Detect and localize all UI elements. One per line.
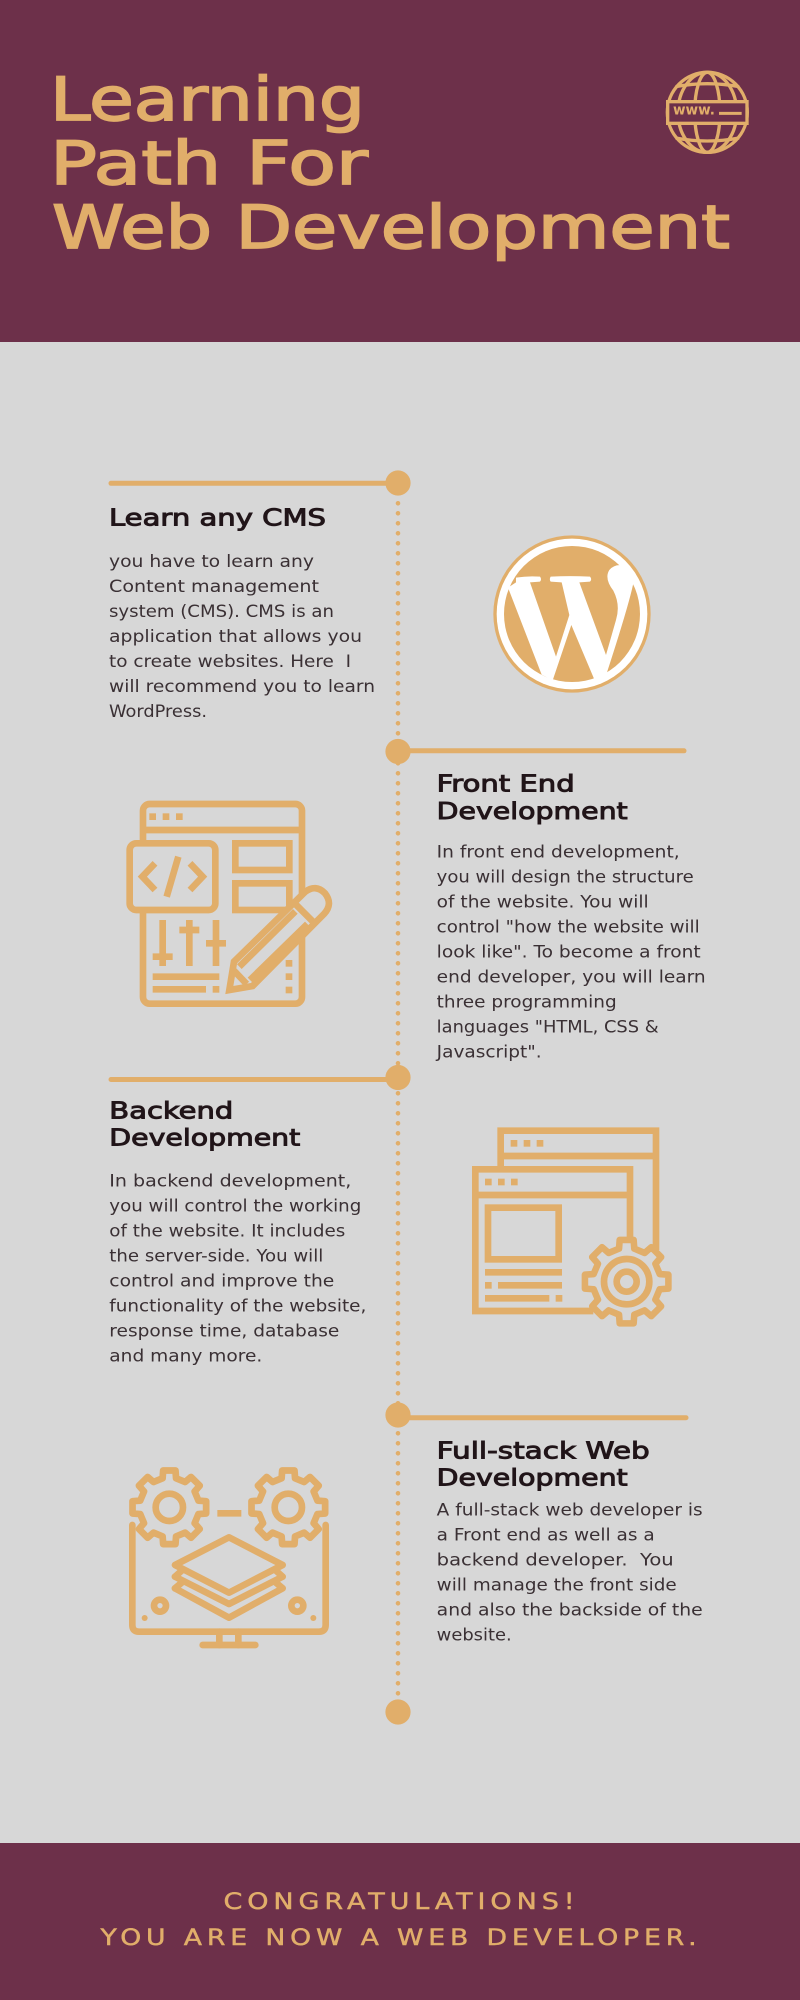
heading: Full-stack Web Development: Development bbox=[437, 1464, 628, 1492]
connector line 2 bbox=[385, 739, 684, 764]
body text: Full-stack Web Development: will manage the front side bbox=[437, 1575, 677, 1595]
body text: Front End Development: control "how the website will bbox=[437, 916, 700, 936]
heading: Backend Development bbox=[109, 1096, 300, 1152]
heading: Backend Development: Backend bbox=[109, 1096, 233, 1124]
footer text: YOU ARE NOW A WEB DEVELOPER. bbox=[99, 1926, 702, 1951]
timeline dotted line bbox=[396, 503, 400, 1705]
body text: Backend Development: control and improve the bbox=[109, 1270, 334, 1290]
title: Web Development bbox=[52, 193, 730, 263]
body text: Front End Development: end developer, you will learn bbox=[437, 966, 706, 986]
body text: Backend Development: response time, database bbox=[109, 1320, 339, 1340]
heading: Front End Development: Development bbox=[437, 797, 628, 825]
icon: monitor with gears and layers bbox=[132, 1471, 326, 1645]
footer text bbox=[99, 1890, 702, 1951]
body text: Backend Development: of the website. It includes bbox=[109, 1220, 345, 1240]
body text: Full-stack Web Development: website. bbox=[437, 1625, 512, 1645]
body text: Front End Development: In front end development, bbox=[437, 841, 680, 861]
body text: Backend Development: and many more. bbox=[109, 1345, 262, 1365]
title: Learning bbox=[50, 65, 365, 135]
body text: Backend Development: you will control the working bbox=[109, 1195, 361, 1215]
heading: Full-stack Web Development bbox=[437, 1436, 650, 1492]
icon: wordpress logo bbox=[493, 535, 651, 693]
heading: Backend Development: Development bbox=[109, 1124, 300, 1152]
body text: Full-stack Web Development bbox=[437, 1500, 703, 1645]
body text: Front End Development: languages "HTML, CSS & bbox=[437, 1016, 659, 1036]
body text: Front End Development: look like". To become a front bbox=[437, 941, 701, 961]
body text: Learn any CMS: Content management bbox=[109, 576, 319, 596]
panel: footer bbox=[0, 1843, 800, 2000]
body text: Full-stack Web Development: backend developer. You bbox=[437, 1550, 674, 1570]
body text: Full-stack Web Development: and also the backside of the bbox=[437, 1600, 703, 1620]
body text: Front End Development: of the website. You will bbox=[437, 891, 649, 911]
footer text: CONGRATULATIONS! bbox=[224, 1890, 580, 1915]
body text: Front End Development: three programming bbox=[437, 991, 617, 1011]
icon: globe www: www. bbox=[673, 103, 715, 119]
connector line 1 bbox=[111, 470, 411, 496]
body text: Front End Development bbox=[436, 841, 706, 1061]
section: Learn any CMS bbox=[109, 470, 651, 721]
body text: Learn any CMS: will recommend you to learn bbox=[109, 676, 375, 696]
panel: header bbox=[0, 0, 800, 342]
body text: Learn any CMS: application that allows you bbox=[109, 626, 362, 646]
icon: web design window with code and pencil bbox=[130, 804, 329, 1004]
section: Full-stack Web Development bbox=[132, 1402, 703, 1645]
icon: browser windows with gear bbox=[475, 1131, 668, 1323]
body text: Front End Development: you will design the structure bbox=[437, 866, 694, 886]
body text: Learn any CMS: to create websites. Here I bbox=[109, 651, 351, 671]
connector line 4 bbox=[385, 1402, 686, 1428]
body text: Backend Development: the server-side. You will bbox=[109, 1245, 323, 1265]
timeline end dot bbox=[385, 1699, 411, 1725]
heading: Full-stack Web Development: Full-stack Web bbox=[437, 1436, 650, 1464]
title: Path For bbox=[50, 129, 368, 199]
body text: Learn any CMS: you have to learn any bbox=[109, 551, 314, 571]
body text: Front End Development: Javascript". bbox=[436, 1041, 542, 1061]
body text: Backend Development bbox=[109, 1170, 366, 1365]
heading: Learn any CMS: Learn any CMS bbox=[109, 504, 326, 532]
body text: Backend Development: In backend development, bbox=[109, 1170, 351, 1190]
connector line 3 bbox=[111, 1065, 411, 1090]
heading: Front End Development bbox=[437, 770, 628, 825]
section: Front End Development bbox=[130, 739, 706, 1061]
section: Backend Development bbox=[109, 1065, 668, 1365]
heading: Front End Development: Front End bbox=[437, 770, 575, 798]
body text: Learn any CMS: WordPress. bbox=[109, 701, 207, 721]
body text: Backend Development: functionality of the website, bbox=[109, 1295, 366, 1315]
body text: Learn any CMS: system (CMS). CMS is an bbox=[109, 601, 334, 621]
icon: globe www bbox=[667, 72, 747, 152]
title bbox=[50, 65, 730, 263]
body text: Full-stack Web Development: a Front end as well as a bbox=[437, 1525, 655, 1545]
body text: Learn any CMS bbox=[109, 551, 375, 721]
body text: Full-stack Web Development: A full-stack web developer is bbox=[437, 1500, 703, 1520]
